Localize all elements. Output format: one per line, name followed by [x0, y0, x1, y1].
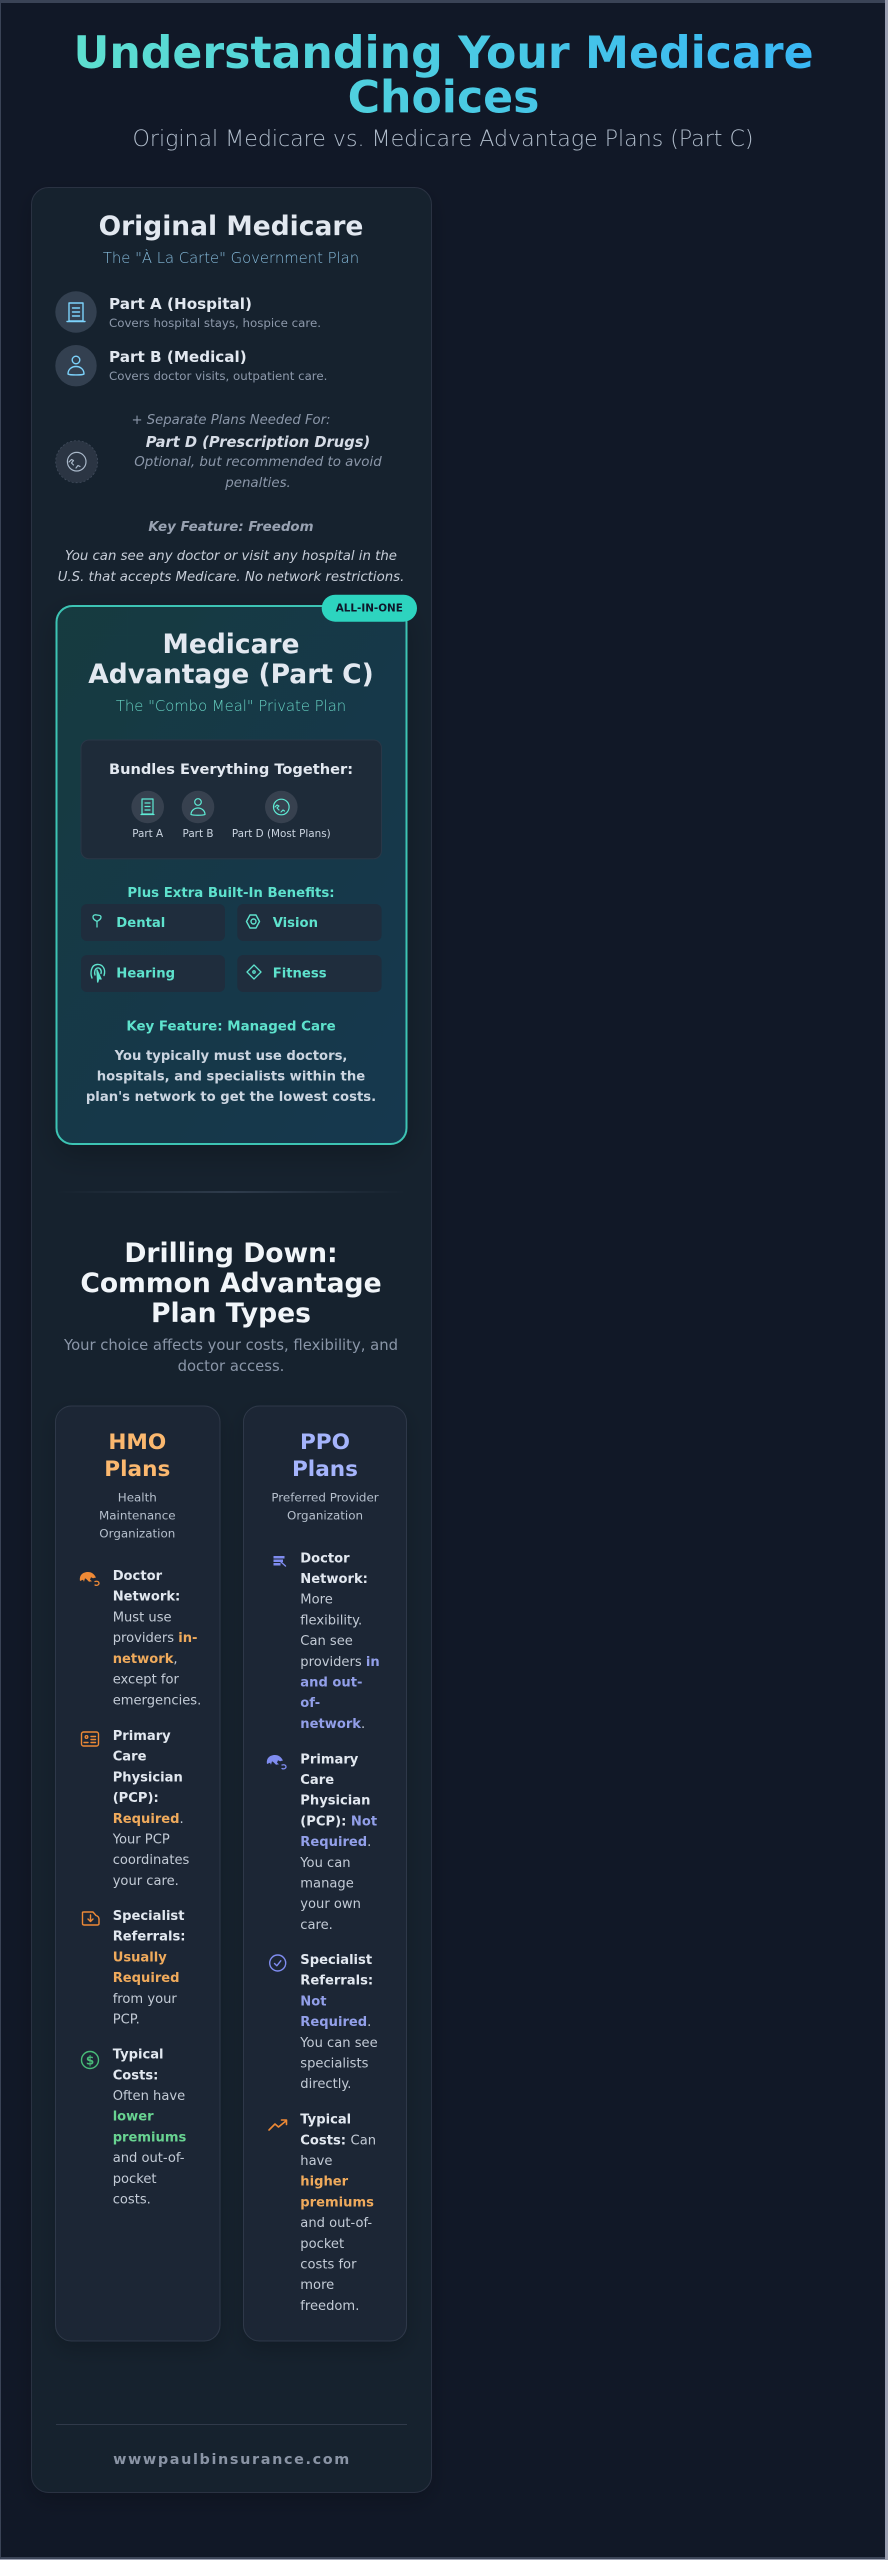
item: ppo doctor network: providers in — [300, 1655, 380, 1670]
item: ppo doctor network: Network: — [300, 1572, 368, 1587]
item: hmo doctor network: emergencies. — [113, 1693, 201, 1708]
item: hmo typical costs: lower — [113, 2110, 154, 2125]
item: ppo primary care physician: manage — [300, 1876, 354, 1892]
item: hmo specialist referrals: Referrals: — [113, 1930, 186, 1945]
item: part d: Optional, but recommended to avoid — [134, 455, 382, 470]
icon: network — [80, 1572, 99, 1585]
item: ppo specialist referrals: Required. — [300, 2015, 371, 2030]
item: part a: Part A (Hospital) — [109, 295, 252, 313]
item: hmo doctor network: Network: — [113, 1590, 180, 1605]
item: ppo primary care physician: Required. — [300, 1835, 371, 1850]
key feature: freedom — [58, 520, 404, 585]
item: ppo doctor network: Doctor — [300, 1551, 350, 1566]
item: hmo primary care physician: Your PCP — [112, 1832, 170, 1848]
benefit: hearing — [81, 955, 225, 992]
heading: medicare advantage — [88, 629, 374, 690]
item: hmo typical costs: and out-of- — [113, 2151, 185, 2166]
item: ppo typical costs — [269, 2113, 376, 2314]
item: ppo typical costs: pocket — [300, 2237, 344, 2252]
panel: medicare advantage — [56, 595, 417, 1144]
heading: drilling down: Common Advantage — [80, 1268, 382, 1299]
item: ppo doctor network — [274, 1551, 380, 1732]
benefit: hearing: Hearing — [116, 967, 175, 982]
badge: all-in-one — [322, 595, 417, 622]
key feature: managed care: Key Feature: Managed Care — [126, 1020, 336, 1035]
icon: referral inbox — [82, 1912, 99, 1925]
item: ppo primary care physician: Physician — [300, 1794, 370, 1809]
heading: medicare advantage: Advantage (Part C) — [88, 659, 374, 690]
description: hmo: Organization — [99, 1526, 175, 1540]
item: part b — [55, 345, 327, 386]
icon: part a — [131, 791, 164, 840]
item: hmo primary care physician: Primary — [113, 1729, 171, 1744]
item: ppo specialist referrals: Not — [300, 1994, 327, 2009]
heading: hmo — [104, 1430, 170, 1482]
item: ppo typical costs: have — [300, 2154, 332, 2169]
heading: medicare advantage: Medicare — [162, 629, 300, 660]
icon: part a: Part A — [132, 828, 164, 840]
panel: hmo plans — [56, 1406, 220, 2341]
key feature: managed care: You typically must use doctors, — [114, 1049, 347, 1064]
icon: person — [55, 345, 97, 386]
description: ppo — [271, 1491, 379, 1522]
heading: hmo: HMO — [108, 1430, 166, 1455]
item: ppo primary care physician: (PCP): Not — [300, 1814, 377, 1829]
item: ppo specialist referrals: directly. — [300, 2077, 351, 2092]
item: hmo specialist referrals: Specialist — [113, 1909, 185, 1924]
item: ppo doctor network: flexibility. — [300, 1613, 362, 1628]
tagline: original medicare: The "À La Carte" Government Plan — [103, 249, 359, 267]
benefit: vision — [237, 904, 382, 941]
heading: ppo: Plans — [292, 1457, 358, 1482]
item: hmo doctor network: providers in- — [113, 1631, 197, 1646]
icon: hospital document — [55, 291, 97, 333]
tagline: medicare advantage: The "Combo Meal" Private Plan — [116, 698, 346, 715]
item: ppo doctor network: Can see — [300, 1634, 353, 1649]
item: ppo typical costs: Typical — [300, 2113, 351, 2128]
icon: part b — [182, 791, 214, 840]
item: hmo typical costs: Costs: — [113, 2068, 158, 2083]
item: hmo typical costs: costs. — [113, 2192, 151, 2208]
icon: search list — [274, 1556, 286, 1566]
item: ppo primary care physician: care. — [300, 1918, 333, 1933]
benefit: dental: Dental — [116, 916, 165, 931]
badge: all-in-one: ALL-IN-ONE — [336, 602, 403, 614]
item: part a: Covers hospital stays, hospice care. — [109, 316, 321, 330]
heading: drilling down: Plan Types — [151, 1298, 311, 1329]
item: part b: Covers doctor visits, outpatient care. — [109, 369, 327, 383]
item: ppo specialist referrals: Specialist — [300, 1953, 372, 1968]
icon: trending up — [269, 2120, 286, 2130]
benefit: dental — [81, 904, 225, 941]
item: hmo doctor network: network, — [113, 1652, 178, 1667]
item: part d: penalties. — [224, 476, 291, 491]
icon: network — [267, 1755, 286, 1769]
item: hmo specialist referrals: from your — [113, 1992, 177, 2007]
item: part d: Part D (Prescription Drugs) — [146, 434, 370, 451]
heading: original medicare: Original Medicare — [99, 211, 363, 242]
item: hmo typical costs — [82, 2048, 187, 2208]
item: ppo primary care physician — [267, 1752, 377, 1933]
panel: bundles — [81, 740, 382, 859]
item: hmo specialist referrals: PCP. — [113, 2012, 140, 2028]
section description: Your choice affects your costs, flexibility, and — [63, 1337, 398, 1354]
item: ppo typical costs: costs for — [300, 2258, 357, 2272]
icon: part d — [232, 791, 331, 840]
title — [73, 28, 814, 124]
heading: ppo — [292, 1430, 358, 1482]
benefit: fitness: Fitness — [273, 967, 327, 982]
item: part a — [55, 291, 321, 333]
panel: bundles: Bundles Everything Together: — [109, 761, 353, 778]
heading: ppo: PPO — [300, 1430, 350, 1455]
icon: dollar: $ — [86, 2054, 94, 2068]
item: hmo specialist referrals — [82, 1909, 186, 2028]
key feature: freedom: Key Feature: Freedom — [148, 520, 314, 535]
item: ppo primary care physician: Care — [300, 1773, 334, 1788]
subtitle: Original Medicare vs. Medicare Advantage Plans (Part C) — [132, 126, 754, 152]
item: hmo specialist referrals: Usually — [113, 1950, 167, 1965]
item: hmo doctor network: except for — [113, 1673, 180, 1688]
benefit: fitness — [237, 955, 382, 992]
item: hmo typical costs: premiums — [113, 2130, 187, 2145]
item: part b: Part B (Medical) — [109, 348, 247, 366]
item: hmo doctor network: Doctor — [113, 1569, 163, 1584]
item: ppo specialist referrals: Referrals: — [300, 1974, 373, 1989]
item: ppo specialist referrals: specialists — [300, 2056, 369, 2072]
item: ppo doctor network: network. — [300, 1717, 365, 1732]
key feature: managed care: hospitals, and specialists within the — [97, 1070, 365, 1085]
description: hmo: Health — [118, 1491, 157, 1505]
key feature: freedom: You can see any doctor or visit any hospital in the — [65, 549, 397, 564]
icon: globe — [56, 441, 98, 483]
item: ppo typical costs: higher — [300, 2175, 349, 2190]
item: part d — [56, 413, 382, 491]
icon: dollar — [82, 2052, 98, 2068]
description: ppo: Organization — [287, 1508, 363, 1522]
key feature: managed care: plan's network to get the lowest costs. — [86, 1090, 376, 1105]
heading: drilling down — [80, 1238, 382, 1329]
item: hmo typical costs: pocket — [113, 2172, 157, 2187]
item: ppo doctor network: of- — [300, 1696, 320, 1711]
panel: main card — [32, 188, 432, 2492]
heading: extra benefits: Plus Extra Built-In Benefits: — [127, 886, 335, 901]
key feature: managed care — [86, 1020, 376, 1105]
item: ppo primary care physician: You can — [299, 1856, 351, 1871]
item: part d: + Separate Plans Needed For: — [132, 413, 330, 428]
item: hmo typical costs: Often have — [113, 2089, 185, 2104]
heading: drilling down: Drilling Down: — [124, 1238, 338, 1269]
heading: hmo: Plans — [104, 1457, 170, 1482]
item: hmo primary care physician: (PCP): — [113, 1791, 159, 1806]
item: ppo doctor network: More — [300, 1593, 333, 1608]
section description — [63, 1337, 398, 1375]
item: hmo doctor network: Must use — [113, 1610, 172, 1625]
item: hmo primary care physician: coordinates — [113, 1853, 190, 1868]
item: hmo doctor network — [80, 1569, 201, 1708]
item: ppo typical costs: premiums — [300, 2195, 374, 2210]
description: ppo: Preferred Provider — [271, 1491, 379, 1505]
description: hmo — [99, 1491, 176, 1540]
footer url: wwwpaulbinsurance.com — [113, 2452, 351, 2468]
item: hmo specialist referrals: Required — [113, 1971, 180, 1986]
item: hmo primary care physician: Required. — [113, 1812, 184, 1827]
icon: check circle — [270, 1955, 286, 1971]
item: hmo primary care physician: your care. — [113, 1874, 179, 1889]
benefit: vision: Vision — [273, 916, 318, 931]
description: hmo: Maintenance — [99, 1508, 176, 1522]
title: Understanding Your Medicare — [73, 28, 814, 79]
item: ppo specialist referrals — [270, 1953, 378, 2092]
item: hmo primary care physician: Physician — [113, 1770, 183, 1785]
item: ppo typical costs: and out-of- — [300, 2216, 372, 2231]
section description: doctor access. — [178, 1358, 284, 1375]
item: ppo primary care physician: your own — [300, 1897, 361, 1912]
icon: id card — [82, 1732, 98, 1746]
icon: part d: Part D (Most Plans) — [232, 828, 331, 840]
item: ppo specialist referrals: You can see — [299, 2036, 378, 2051]
item: hmo typical costs: Typical — [113, 2048, 164, 2063]
item: ppo typical costs: freedom. — [300, 2299, 359, 2314]
item: ppo primary care physician: Primary — [300, 1752, 359, 1767]
icon: part b: Part B — [183, 828, 213, 840]
key feature: freedom: U.S. that accepts Medicare. No network restrictions. — [58, 570, 404, 585]
title: Choices — [348, 72, 539, 124]
item: ppo typical costs: more — [300, 2278, 334, 2293]
item: ppo typical costs: Costs: Can — [300, 2133, 376, 2148]
panel: ppo plans — [244, 1406, 406, 2341]
item: ppo doctor network: and out- — [300, 1676, 362, 1690]
item: hmo primary care physician — [82, 1729, 190, 1889]
item: hmo primary care physician: Care — [113, 1750, 147, 1765]
